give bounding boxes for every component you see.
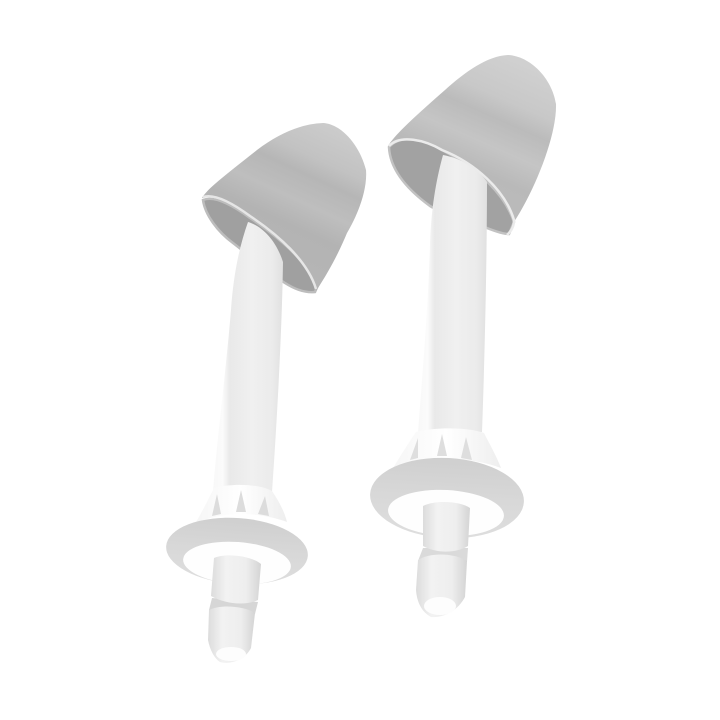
right collar ribs bbox=[410, 434, 472, 460]
right flange white centre bbox=[387, 487, 505, 539]
left flange white centre bbox=[182, 538, 292, 588]
left collar ribs bbox=[212, 490, 269, 516]
right nozzle bbox=[368, 55, 556, 617]
left collar bbox=[195, 485, 287, 524]
left shaft bbox=[213, 222, 283, 492]
right tip end bbox=[424, 597, 456, 615]
right cap bbox=[388, 55, 556, 222]
right collar bbox=[392, 428, 501, 470]
right neck bbox=[418, 548, 468, 562]
right flange bbox=[368, 454, 526, 542]
left flange bbox=[164, 513, 310, 589]
right tip bbox=[416, 554, 467, 617]
right shaft bbox=[418, 155, 487, 432]
left neck bbox=[209, 598, 258, 614]
left cap bbox=[202, 123, 366, 291]
right cap inner shadow bbox=[389, 139, 514, 234]
left tip bbox=[208, 606, 255, 663]
right cap rim bbox=[389, 139, 514, 235]
left stub bbox=[211, 555, 261, 603]
left nozzle bbox=[164, 123, 366, 663]
left cap inner shadow bbox=[203, 199, 318, 292]
left tip end bbox=[216, 647, 246, 661]
left cap rim bbox=[203, 196, 316, 289]
right stub bbox=[423, 502, 470, 552]
